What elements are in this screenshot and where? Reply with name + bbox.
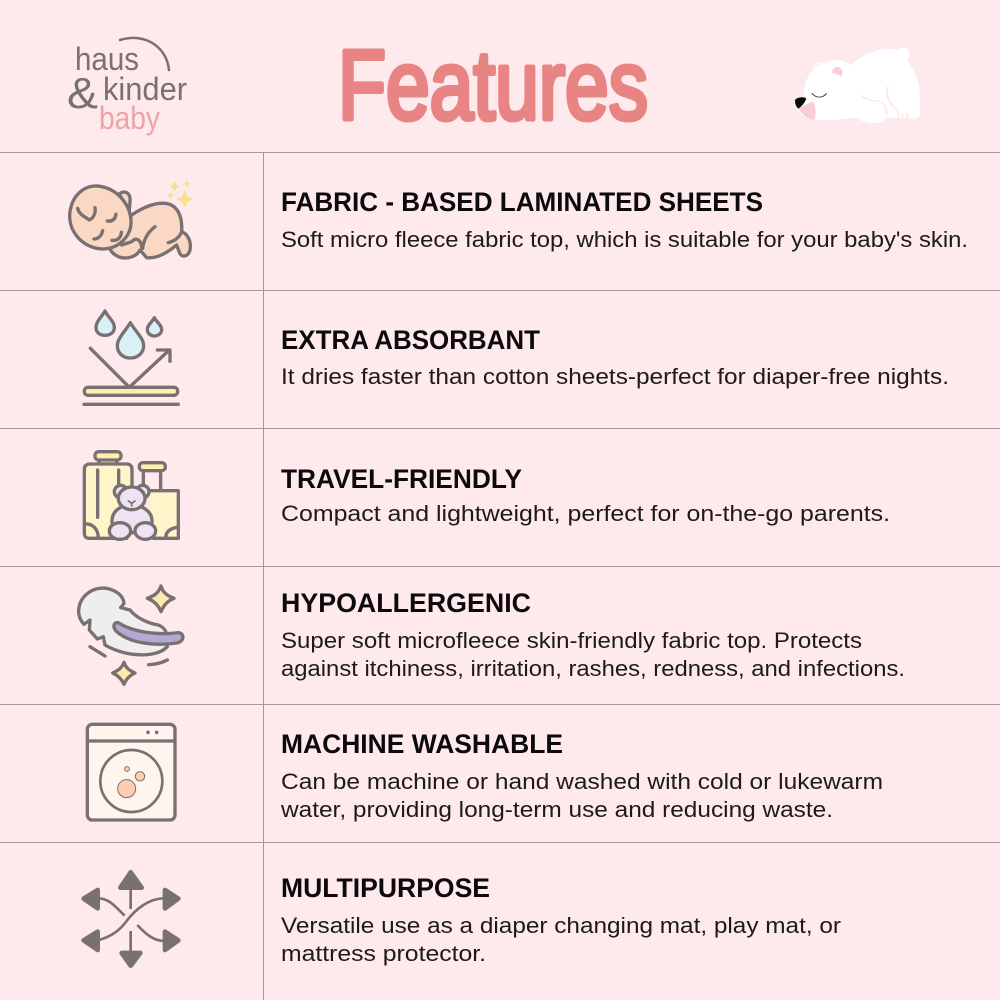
row 2 text: It dries faster than cotton sheets-perfect for diaper-free nights. (281, 364, 949, 389)
logo: haus & kinder baby: baby (99, 100, 160, 136)
row 4 text: Super soft microfleece skin-friendly fabric top. Protects (281, 628, 862, 653)
icon: feather and sparkles (79, 586, 183, 684)
row 6 text (281, 873, 842, 966)
title: Features: Features (338, 30, 648, 140)
row 6 text: mattress protector. (281, 941, 486, 966)
icon: multipurpose arrows (84, 872, 178, 966)
row 2 text (281, 325, 949, 389)
row 4 text (281, 588, 905, 681)
row 2 text: EXTRA ABSORBANT (281, 325, 540, 355)
sparkles (167, 179, 193, 208)
row 3 text (281, 464, 890, 526)
row 5 text (280, 729, 883, 822)
row 5 text: MACHINE WASHABLE (281, 729, 563, 759)
row 1 text (281, 187, 968, 252)
icon: sleeping polar bear (795, 47, 920, 123)
row 5 text: water, providing long-term use and reducing waste. (280, 797, 833, 822)
row 3 text: TRAVEL-FRIENDLY (281, 464, 522, 494)
row 6 text: MULTIPURPOSE (281, 873, 490, 903)
icon: washing machine (87, 724, 175, 820)
row 1 text: FABRIC - BASED LAMINATED SHEETS (281, 187, 763, 217)
row 3 text: Compact and lightweight, perfect for on-the-go parents. (281, 501, 890, 526)
baby (70, 186, 190, 258)
teddy (109, 485, 156, 539)
row 5 text: Can be machine or hand washed with cold or lukewarm (281, 769, 883, 794)
row 1 text: Soft micro fleece fabric top, which is suitable for your baby's skin. (281, 227, 968, 252)
row 4 text: against itchiness, irritation, rashes, redness, and infections. (281, 656, 905, 681)
icon: extra absorbent drops (84, 311, 178, 404)
logo: haus & kinder baby (67, 38, 187, 136)
logo: haus & kinder baby: haus (75, 41, 139, 77)
icon: luggage and teddy bear (84, 452, 178, 539)
logo: haus & kinder baby: & (67, 69, 98, 118)
row 4 text: HYPOALLERGENIC (281, 588, 531, 618)
row 6 text: Versatile use as a diaper changing mat, play mat, or (281, 913, 842, 938)
icon: sleeping baby (70, 179, 193, 258)
logo: haus & kinder baby: kinder (103, 71, 187, 107)
